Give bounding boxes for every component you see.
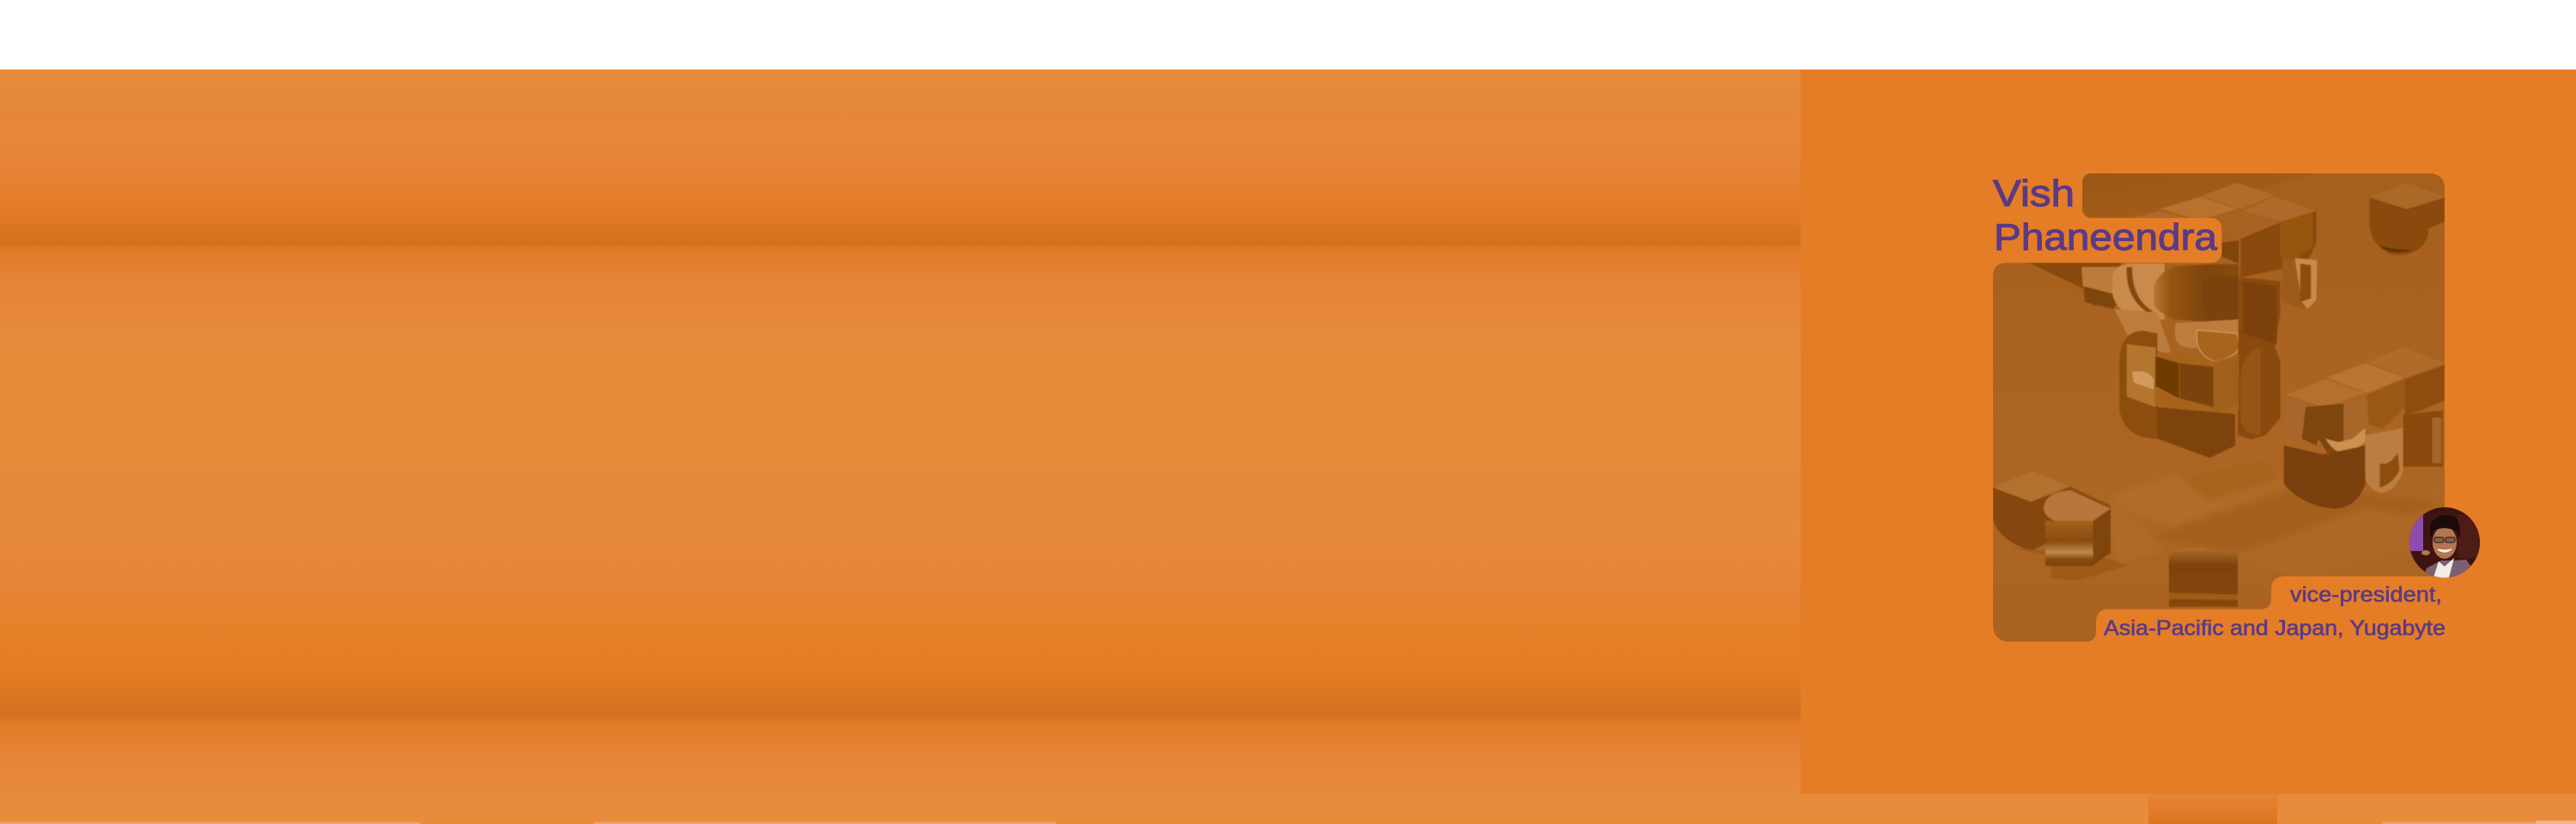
top stack of cubes: [2132, 183, 2318, 309]
speaker role text: [2104, 583, 2445, 640]
role line 1: vice-president,: [2290, 583, 2442, 607]
central dark column: [2238, 277, 2281, 439]
top-right cube: [2370, 183, 2445, 255]
white top margin: [0, 0, 2576, 70]
heading: speaker name: [1993, 173, 2218, 258]
bottom-left cubes: [1993, 471, 2129, 580]
central lens block: [2154, 264, 2240, 361]
bottom highlight strips: [0, 821, 2576, 824]
darker bottom tab below panel: [2148, 794, 2277, 824]
right cube cluster: [2284, 348, 2445, 509]
avatar: speaker portrait: [2409, 507, 2480, 578]
floor panels: [2119, 480, 2425, 549]
role line 2: Asia-Pacific and Japan, Yugabyte: [2104, 616, 2445, 640]
lower glass block: [2119, 330, 2239, 457]
panel: profile card: [1801, 70, 2576, 794]
upper-left lens row: [2029, 263, 2172, 354]
profile photo: duotone glass cubes: [1991, 173, 2446, 644]
bottom cylinder: [2169, 548, 2238, 607]
name line 1: Vish: [1993, 173, 2075, 215]
name line 2: Phaneendra: [1994, 216, 2218, 258]
